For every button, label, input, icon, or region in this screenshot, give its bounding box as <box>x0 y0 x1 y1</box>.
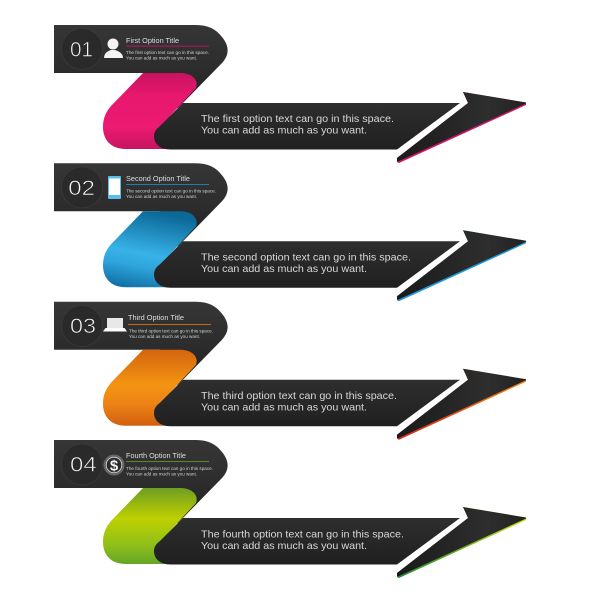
arrow head 1 <box>397 92 526 163</box>
main text 3 <box>201 391 397 414</box>
step 2 <box>54 163 526 301</box>
number badge 3: 03 <box>70 315 96 338</box>
step 3 <box>54 302 526 440</box>
top band 4 <box>54 440 228 523</box>
ribbon 2 <box>103 211 197 287</box>
icon: dollar coin: $ <box>110 458 119 474</box>
small text 4: You can add as much as you want. <box>126 471 197 477</box>
small text 1: You can add as much as you want. <box>126 56 197 62</box>
number badge 3 <box>62 306 102 346</box>
number badge 2: 02 <box>68 177 95 200</box>
ribbon 3 <box>103 350 197 426</box>
number badge 1: 01 <box>70 38 93 61</box>
icon: dollar coin <box>104 454 124 476</box>
lower band 1 <box>154 103 460 150</box>
small text 2: You can add as much as you want. <box>126 194 197 200</box>
icon: laptop <box>103 318 127 332</box>
main text 3: The third option text can go in this space. <box>201 391 397 402</box>
lower band 4 <box>154 518 460 564</box>
icon: phone <box>108 176 121 199</box>
main text 2 <box>201 252 411 275</box>
ribbon 1 <box>103 73 197 149</box>
main text 2: You can add as much as you want. <box>201 264 367 275</box>
arrow head 2 <box>397 230 526 301</box>
lower band 2 <box>154 241 460 288</box>
small text 4: The fourth option text can go in this space. <box>126 466 213 472</box>
number badge 2 <box>62 167 102 208</box>
main text 4: You can add as much as you want. <box>201 541 367 552</box>
title rule 3 <box>128 323 211 326</box>
lower band 3 <box>154 380 460 426</box>
small text 3: The third option text can go in this space. <box>129 328 213 334</box>
main text 4: The fourth option text can go in this space. <box>201 530 404 540</box>
title 3: Third Option Title <box>128 313 184 322</box>
title rule 2 <box>126 183 209 186</box>
title 2: Second Option Title <box>126 174 190 183</box>
title 4: Fourth Option Title <box>126 451 186 460</box>
title 1: First Option Title <box>126 36 179 45</box>
main text 4 <box>201 530 404 552</box>
top band 2 <box>54 163 228 246</box>
main text 3: You can add as much as you want. <box>201 402 367 414</box>
small text 1: The first option text can go in this space. <box>126 50 209 56</box>
ribbon 4 <box>103 488 197 564</box>
top band 3 <box>54 302 228 385</box>
step 4 <box>54 440 526 578</box>
small text 4 <box>126 466 213 477</box>
small text 1 <box>126 50 209 62</box>
small text 2: The second option text can go in this space. <box>126 188 216 194</box>
small text 3 <box>129 328 213 340</box>
top band 1 <box>54 25 228 108</box>
step 1 <box>54 25 526 163</box>
main text 1: The first option text can go in this space. <box>201 114 394 125</box>
main text 2: The second option text can go in this space. <box>201 252 411 264</box>
arrow head 3 <box>397 369 526 440</box>
small text 2 <box>126 188 216 200</box>
title rule 4 <box>126 460 209 463</box>
main text 1 <box>201 114 394 136</box>
icon: person <box>104 38 123 58</box>
number badge 4: 04 <box>70 453 97 476</box>
small text 3: You can add as much as you want. <box>129 334 200 340</box>
number badge 1 <box>62 28 102 70</box>
number badge 4 <box>62 444 102 485</box>
arrow head 4 <box>397 507 526 578</box>
main text 1: You can add as much as you want. <box>201 126 367 136</box>
title rule 1 <box>126 45 209 48</box>
